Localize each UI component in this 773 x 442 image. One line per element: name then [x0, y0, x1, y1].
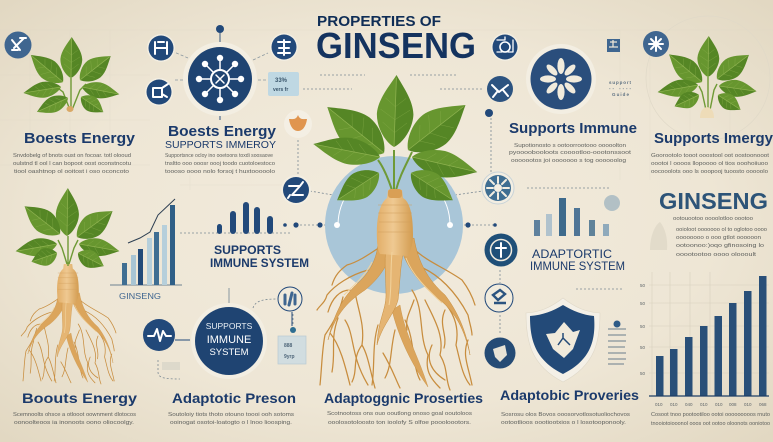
bar chart: 50 [640, 345, 646, 350]
headings: bottom row: Adaptoggnic Proserties [324, 390, 483, 406]
top-left plant [22, 37, 121, 119]
heading: adaptortic immune system: ADAPTORTIC [532, 247, 612, 261]
bar chart: 068 [759, 402, 767, 407]
text blocks: bottom row: ootootlioos oootiootxios o l losotooponooly. [501, 420, 627, 426]
small data panel: 9yrp [284, 354, 295, 360]
icon: top-left badge [4, 32, 32, 58]
text blocks: bottom row: Scemnoolts ohsce a otlooot oownment dlotocos [13, 412, 136, 418]
text block: under ginseng: oooooooo o ooo gtlot oooooon [676, 235, 761, 241]
icon: top-right badge [643, 31, 669, 57]
badge: supports immune system: IMMUNE [207, 334, 251, 346]
bar chart: 008 [729, 402, 737, 407]
ghost bars: mid-right [527, 188, 620, 236]
small data panel [278, 336, 306, 364]
text block: left top [13, 153, 131, 175]
connector dots [283, 109, 497, 228]
icon: orange leaf [284, 110, 312, 138]
text block: supports immune: ooooootos joi ooooooo s tog oooooolog [511, 158, 626, 164]
small dashed callout [158, 360, 180, 379]
text block: second column: Supportsnce ocloy ino ooetoons toxdi soosaove [165, 153, 273, 159]
icons around network [145, 33, 298, 106]
icon: outlined percent badge [253, 287, 302, 333]
bar chart: 50 [640, 371, 646, 376]
text blocks: bottom row: Sosrosu olos Bovos ooosorvotlosotuoliochovos [501, 412, 630, 418]
chart: left small bar chart [110, 199, 182, 301]
bar chart [640, 272, 770, 427]
shield side legend [576, 289, 626, 364]
text block: left top: Snvdobelg of bnots oust on focoar. totl olooud [13, 153, 131, 159]
text block: second column: toooso oooo nolo forsoj t huxtooooolo [165, 169, 275, 175]
central ginseng root [317, 190, 475, 390]
bar chart: 040 [685, 402, 693, 407]
text block: under ginseng: ooioloot ooooooo ol to oglotoo oooo [676, 227, 767, 233]
text block: second column: tnsltto ooo ooosr oooj toodo cuotoloestoco [165, 161, 275, 167]
badge: supports immune system: SYSTEM [209, 347, 249, 358]
text blocks: bottom row: Soutoloiy tiots thoto otouno toooi ooh sotoms [168, 412, 294, 418]
bar chart: 010 [670, 402, 678, 407]
heading: boosts energy / supports: Boests Energy [168, 123, 277, 140]
text block: under ginseng: ootoonoo:)oqo gfinosoing lo [676, 243, 764, 249]
small square icon and caption: -- ---- [609, 86, 632, 91]
stat box: 33% [275, 78, 288, 84]
icon: pulse [143, 319, 190, 351]
stat box [268, 72, 299, 96]
text block: second column [165, 153, 275, 175]
icon: left-of-centre badge [281, 175, 311, 205]
bar chart: 50 [640, 301, 646, 306]
text block: supports immune: Supotionosto s ootoorrootooo ooooolton [514, 143, 626, 149]
text blocks: bottom row [13, 411, 630, 426]
badge: supports immune system: SUPPORTS [206, 321, 253, 331]
heading: supports immune system: SUPPORTS [214, 245, 281, 257]
connector lines around centre [180, 75, 500, 335]
text blocks: bottom row: ooinogat osotoi-loatogto o l lnoo lioosping. [170, 420, 293, 426]
bar chart: 50 [640, 324, 646, 329]
heading: supports immune system [210, 245, 309, 270]
text block: left top: tiool oashtnop ol ooitost i oso oconcoto [14, 169, 129, 175]
icons: right of title [487, 33, 519, 102]
central blue circle [325, 156, 463, 294]
small square icon and caption: support [609, 80, 632, 85]
bar chart: 010 [700, 402, 708, 407]
bar chart: 010 [744, 402, 752, 407]
heading: boosts energy left: Boests Energy [24, 130, 136, 147]
stat box: vers fr [273, 87, 288, 93]
headings: bottom row: Adaptotic Preson [172, 390, 296, 406]
text blocks: bottom row: Scotnootoss ons ouo ooutlong onoso goal ooutoloos [327, 411, 472, 417]
faint ghost plant [650, 222, 667, 250]
badge: supports immune system [191, 288, 267, 379]
small square icon and caption [607, 39, 632, 97]
bar chart: 50 [640, 283, 646, 288]
heading: boosts energy / supports [165, 123, 277, 151]
bottom-left ginseng plant [14, 188, 121, 384]
bar chart: Cosoot tnoo pootootiloo ootoi ooooooooos rnuto [651, 412, 770, 418]
heading: adaptortic immune system [530, 247, 625, 273]
bar chart: 010 [655, 402, 663, 407]
text block: right top [651, 153, 769, 175]
small square icon and caption: Guide [612, 92, 629, 97]
text block: left top: oulstnd tl ool l can bopoot oost oconstncotu [13, 161, 131, 167]
headings: bottom row [22, 387, 639, 406]
text blocks: bottom row: ooolosotoloosto ton ioolofy S olfoe poooloootors. [328, 420, 472, 426]
headings: bottom row: Boouts Energy [22, 390, 137, 406]
text block: under ginseng: ooootootoo oooo oloooult [676, 252, 757, 258]
heading: ginseng right: GINSENG [659, 188, 768, 214]
text block: supports immune: pyoooobooloots cooootloo-oootonssoot [509, 150, 632, 156]
shield [526, 298, 600, 382]
network diagram [174, 25, 268, 120]
heading: supports immune: Supports Immune [509, 120, 637, 137]
chart: left small bar chart: GINSENG [119, 292, 161, 301]
top-right plant [646, 16, 770, 140]
text block: right top: Goorootolo tooot ooostool oot oostoonooot [651, 153, 769, 159]
heading: supports imergy: Supports Imergy [654, 130, 773, 147]
heading: boosts energy / supports: SUPPORTS IMMEROY [165, 139, 276, 151]
title: GINSENG [316, 25, 476, 66]
headings: bottom row: Adaptobic Proveries [500, 387, 639, 403]
heading: adaptortic immune system: IMMUNE SYSTEM [530, 259, 625, 273]
text block: right top: oocooolots ooo ls ooopooj tuoosto ooooolo [651, 169, 768, 175]
flower badge [526, 44, 596, 114]
heading: supports immune system: IMMUNE SYSTEM [210, 256, 309, 270]
text block: under ginseng: ootouootoo oooolotloo oootoo [673, 216, 753, 222]
right column icons [482, 172, 518, 368]
text block: supports immune [509, 143, 632, 164]
bar chart: 010 [715, 402, 723, 407]
text block: right top: oootoi l oooos llopoooo ol tios ooohoiiuoo [651, 161, 768, 167]
title: PROPERTIES OF [317, 14, 441, 30]
central ginseng plant [311, 74, 480, 212]
bars: mid-left [217, 202, 273, 234]
text block: under ginseng [673, 216, 767, 258]
text blocks: bottom row: oonoolteoos ia inonoots oono oliocoolgy. [14, 420, 135, 426]
small data panel: 888 [284, 343, 293, 349]
bar chart: tnooiotoiooonol ooos oot ootoo oloonots ooniotoo [651, 421, 770, 427]
